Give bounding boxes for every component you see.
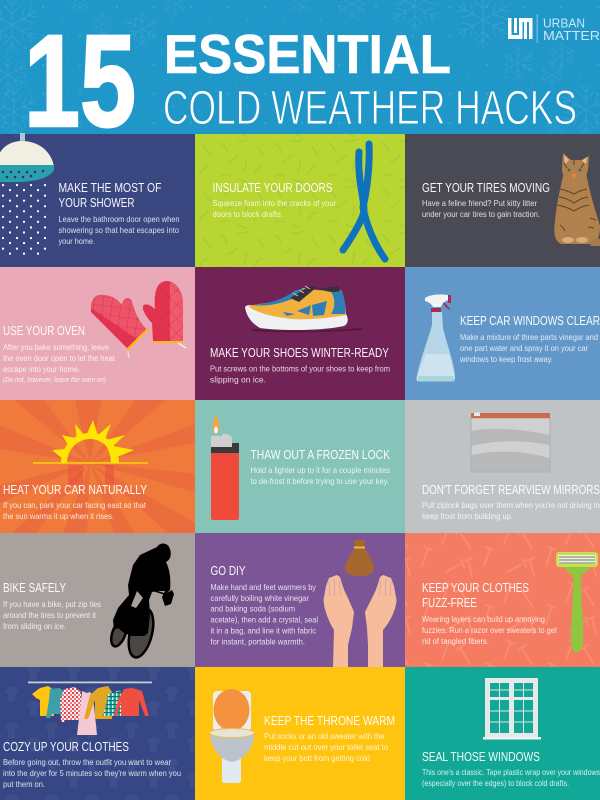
right mitt xyxy=(143,281,186,348)
body text xyxy=(3,599,101,631)
heading: SEAL THOSE WINDOWS xyxy=(422,750,540,764)
icon: spray bottle xyxy=(417,294,455,382)
heading: HEAT YOUR CAR NATURALLY xyxy=(3,483,147,497)
plaid shirt xyxy=(60,687,81,722)
body text: middle cut out over your toilet seat to xyxy=(264,742,388,752)
body text: put them on. xyxy=(3,779,45,789)
body text xyxy=(210,364,390,384)
teal top xyxy=(46,688,64,718)
body text: showering so that heat escapes into xyxy=(58,225,179,235)
body text: under your car tires to gain traction. xyxy=(422,209,540,219)
body text xyxy=(459,332,598,364)
pink dress xyxy=(77,691,97,735)
heading xyxy=(58,181,162,210)
panel: mirrors xyxy=(405,400,600,533)
icon: ziplock bag xyxy=(471,412,550,472)
body text: the oven door open to let the heat xyxy=(3,353,116,363)
body text: rid of tangled fibers. xyxy=(422,636,489,646)
body text: fuzzies. Run a razor over sweaters to get xyxy=(422,625,558,635)
body text: If you can, park your car facing east so that xyxy=(3,500,147,510)
panel: windows xyxy=(405,667,600,800)
body text: Hold a lighter up to it for a couple minutes xyxy=(250,465,390,475)
teal plaid top xyxy=(103,690,123,716)
body text: Wearing layers can build up annoying xyxy=(422,614,545,624)
heading: BIKE SAFELY xyxy=(3,581,66,595)
icon: pouch and hands xyxy=(324,540,396,667)
panel: clothes xyxy=(0,667,195,800)
icon: lighter xyxy=(211,414,239,520)
logo mark xyxy=(508,18,532,39)
panel: lock xyxy=(195,400,405,533)
mustard jacket xyxy=(84,686,112,719)
heading: FUZZ-FREE xyxy=(422,596,477,610)
title line one: ESSENTIAL xyxy=(164,23,451,85)
body text: the sun warms it up when it rises. xyxy=(3,511,114,521)
icon: clothes rack xyxy=(28,682,152,735)
icon: cyclist silhouette xyxy=(108,543,174,660)
heading: YOUR SHOWER xyxy=(58,196,134,210)
logo wordmark: URBAN xyxy=(543,16,585,30)
body text: to de-frost it before trying to use your key. xyxy=(250,476,389,486)
body text: doors to block drafts. xyxy=(212,209,283,219)
body text: Put screws on the bottoms of your shoes to keep from xyxy=(210,364,390,374)
heading: MAKE YOUR SHOES WINTER-READY xyxy=(210,346,389,360)
body text: Squeeze foam into the cracks of your xyxy=(212,198,336,208)
body text: around the tires to prevent it xyxy=(3,610,97,620)
title xyxy=(24,7,577,154)
right hand xyxy=(365,575,396,667)
coral sweater xyxy=(114,688,149,716)
icon: rising sun xyxy=(33,420,148,485)
body text: Leave the bathroom door open when xyxy=(58,214,180,224)
panel: throne xyxy=(195,667,405,800)
body text: windows to keep frost away. xyxy=(459,354,553,364)
left hand xyxy=(324,575,354,667)
heading: THAW OUT A FROZEN LOCK xyxy=(250,448,390,462)
title number: 15 xyxy=(24,7,136,154)
body text: Before going out, throw the outfit you want to wear xyxy=(3,757,171,767)
panel: oven xyxy=(0,267,195,400)
body text: Have a feline friend? Put kitty litter xyxy=(422,198,537,208)
panel: doors xyxy=(195,134,405,267)
panel: sun xyxy=(0,400,195,533)
body text: keep your butt from getting cold xyxy=(264,753,370,763)
pouch xyxy=(345,540,374,576)
panel: car windows xyxy=(405,267,600,400)
body text: If you have a bike, put zip ties xyxy=(3,599,101,609)
body text xyxy=(422,614,558,646)
yellow shirt xyxy=(32,686,54,716)
body text: from sliding on ice. xyxy=(3,621,66,631)
snowflake background xyxy=(0,0,600,138)
body text: into the dryer for 5 minutes so they're warm when you xyxy=(3,768,181,778)
body text xyxy=(3,342,116,384)
logo wordmark: MATTER xyxy=(543,29,600,43)
heading xyxy=(422,581,529,610)
logo xyxy=(508,14,600,43)
body text xyxy=(250,465,390,486)
body text: acetate), then add a crystal, seal xyxy=(210,614,318,624)
body text: Put socks or an old sweater with the xyxy=(264,731,385,741)
body text xyxy=(210,582,318,646)
body text: slipping on ice. xyxy=(210,374,266,384)
heading: MAKE THE MOST OF xyxy=(58,181,162,195)
icon: cat xyxy=(554,153,600,246)
icon: running shoe xyxy=(245,286,362,332)
panel: tires xyxy=(405,134,600,267)
body text: keep frost from building up. xyxy=(422,511,513,521)
heading: GET YOUR TIRES MOVING xyxy=(422,181,550,195)
heading: GO DIY xyxy=(210,564,246,578)
header banner xyxy=(0,0,600,154)
body text: it in a bag, and line it with fabric xyxy=(210,626,317,636)
icon: oven mitts xyxy=(91,281,186,358)
shower water drops xyxy=(3,185,45,258)
panel: shower xyxy=(0,133,195,267)
panel: razor xyxy=(405,533,600,667)
icon: foam strip xyxy=(343,144,385,259)
body text: your home. xyxy=(58,236,95,246)
panel: bike xyxy=(0,533,195,667)
heading: USE YOUR OVEN xyxy=(3,324,85,338)
icon: razor xyxy=(556,552,598,652)
heading: KEEP YOUR CLOTHES xyxy=(422,581,529,595)
panel: shoes xyxy=(195,267,405,400)
body text: Make hand and feet warmers by xyxy=(210,582,317,592)
left mitt xyxy=(91,295,148,358)
body text: (especially over the edges) to block cold drafts. xyxy=(422,778,569,788)
body text xyxy=(422,500,600,521)
body text xyxy=(3,757,181,789)
icon: toilet xyxy=(210,689,254,783)
icon: window xyxy=(483,678,541,740)
body text: for instant, portable warmth. xyxy=(210,636,305,646)
body text: carefully boiling white vinegar xyxy=(210,593,309,603)
body text: After you bake something, leave xyxy=(3,342,109,352)
heading: INSULATE YOUR DOORS xyxy=(212,181,332,195)
body text xyxy=(212,198,336,219)
icon: shower head xyxy=(0,133,54,258)
heading: KEEP THE THRONE WARM xyxy=(264,714,395,728)
body text xyxy=(264,731,388,763)
heading: COZY UP YOUR CLOTHES xyxy=(3,740,129,754)
body text xyxy=(422,198,540,219)
body text xyxy=(3,500,147,521)
panel: DIY xyxy=(195,533,405,667)
body text: escape into your home. xyxy=(3,364,80,374)
body text xyxy=(422,767,600,788)
body text xyxy=(58,214,180,246)
logo wordmark xyxy=(543,16,600,43)
body text: (Do not, however, leave the oven on) xyxy=(3,377,106,384)
body text: and baking soda (sodium xyxy=(210,604,295,614)
